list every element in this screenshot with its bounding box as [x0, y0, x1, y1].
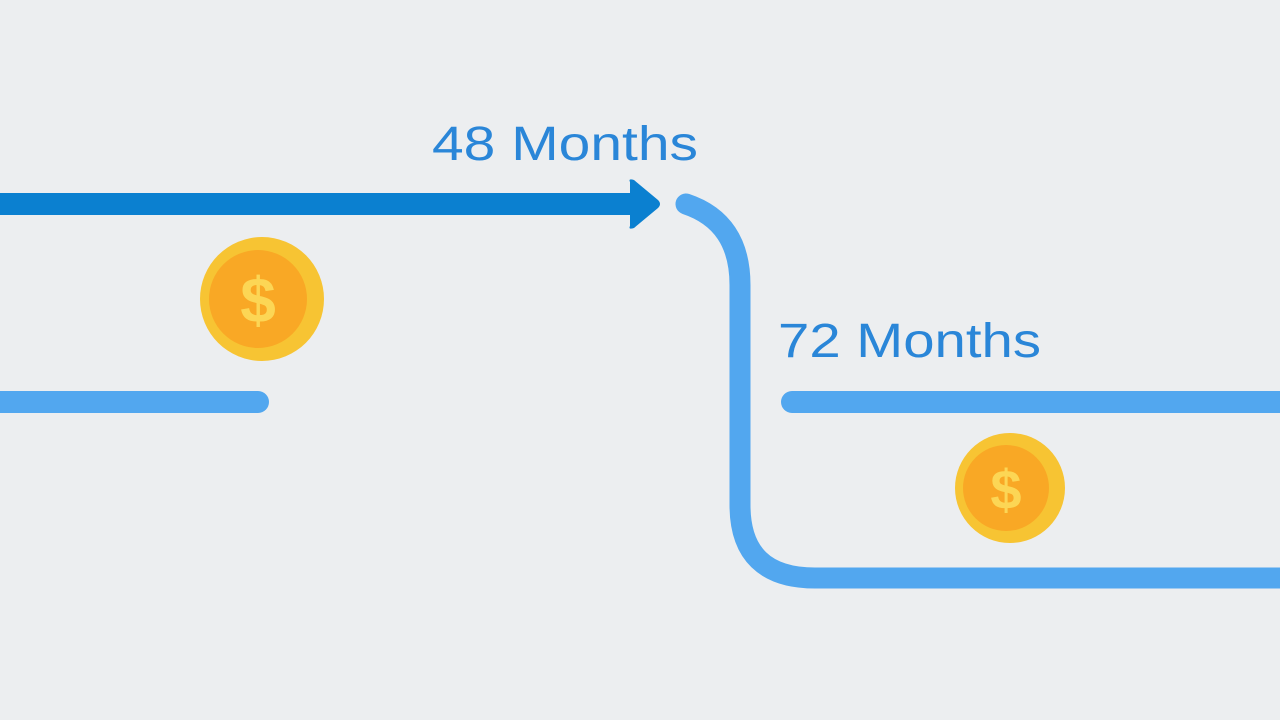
icon: coin right: $	[990, 458, 1022, 521]
line: right lower	[792, 391, 1280, 413]
line: left lower	[0, 391, 258, 413]
icon: coin left: $	[240, 264, 276, 336]
label: 48 Months: 48 Months	[432, 118, 698, 171]
icon: coin right	[955, 433, 1065, 543]
arrow: 48 months	[0, 179, 660, 229]
icon: coin left	[200, 237, 324, 361]
curved path to 72 months	[686, 204, 1280, 578]
label: 72 Months: 72 Months	[778, 315, 1041, 368]
